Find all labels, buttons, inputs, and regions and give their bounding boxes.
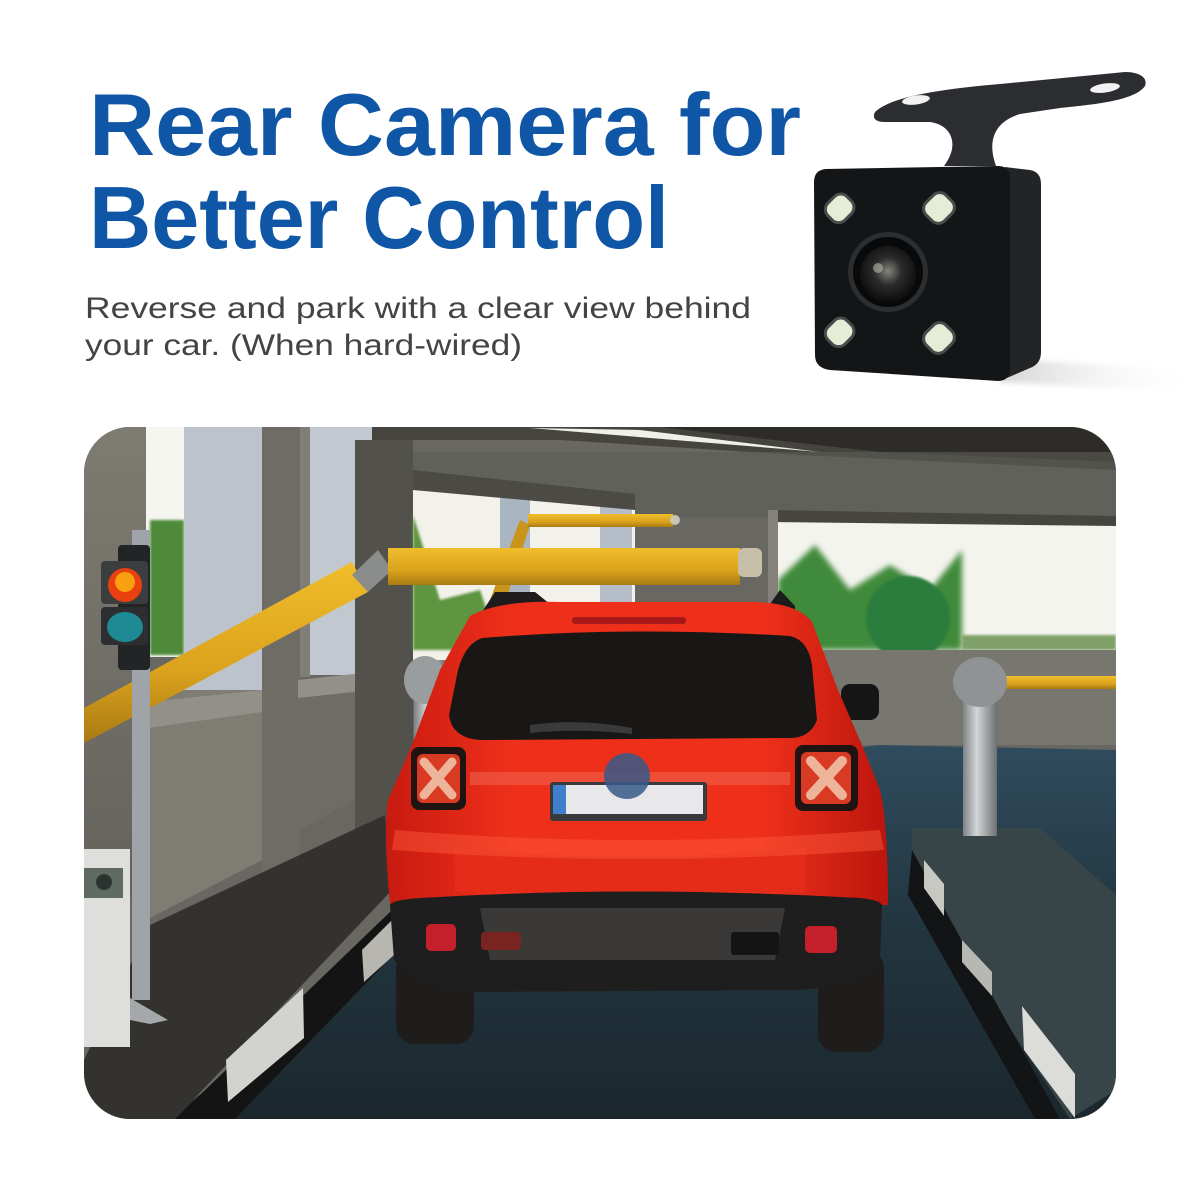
right barrier post and arm xyxy=(953,657,1116,836)
rear barrier post xyxy=(404,656,446,740)
car tyres xyxy=(396,950,884,1052)
front yellow barrier arm xyxy=(84,548,762,743)
garage background xyxy=(84,427,1116,1119)
rear bumper xyxy=(390,892,882,992)
title: Rear Camera for xyxy=(89,75,801,174)
rear yellow barrier arm xyxy=(490,514,680,600)
right window xyxy=(768,510,1116,660)
subtitle text: Reverse and park with a clear view behind xyxy=(85,292,751,325)
ticket machine xyxy=(84,849,130,1047)
licence plate xyxy=(550,782,707,821)
subtitle text: your car. (When hard-wired) xyxy=(85,329,522,362)
left kerb xyxy=(84,815,398,1119)
road floor xyxy=(170,745,1116,1119)
rear window xyxy=(449,631,817,740)
camera LEDs xyxy=(822,189,958,357)
photo: parking garage exit with red car xyxy=(84,427,1116,1119)
traffic light xyxy=(101,530,168,1024)
right tail light xyxy=(795,745,858,811)
car body xyxy=(386,602,888,905)
high-mounted brake light xyxy=(572,617,686,624)
left window openings xyxy=(84,427,413,920)
icon: rear camera product xyxy=(814,72,1200,392)
right wall below window xyxy=(800,650,1116,745)
car roof rails xyxy=(483,590,795,610)
title xyxy=(89,75,801,267)
camera position marker xyxy=(604,753,650,799)
camera lens xyxy=(848,232,928,312)
left tail light xyxy=(411,747,466,810)
centre window xyxy=(413,470,635,660)
right kerb xyxy=(908,828,1116,1119)
subtitle text xyxy=(85,292,751,362)
title: Better Control xyxy=(89,168,669,267)
lower body highlights xyxy=(392,772,884,892)
side mirror xyxy=(841,684,879,720)
camera housing xyxy=(814,166,1041,381)
red car xyxy=(386,590,888,1052)
camera mounting bracket xyxy=(874,72,1146,166)
